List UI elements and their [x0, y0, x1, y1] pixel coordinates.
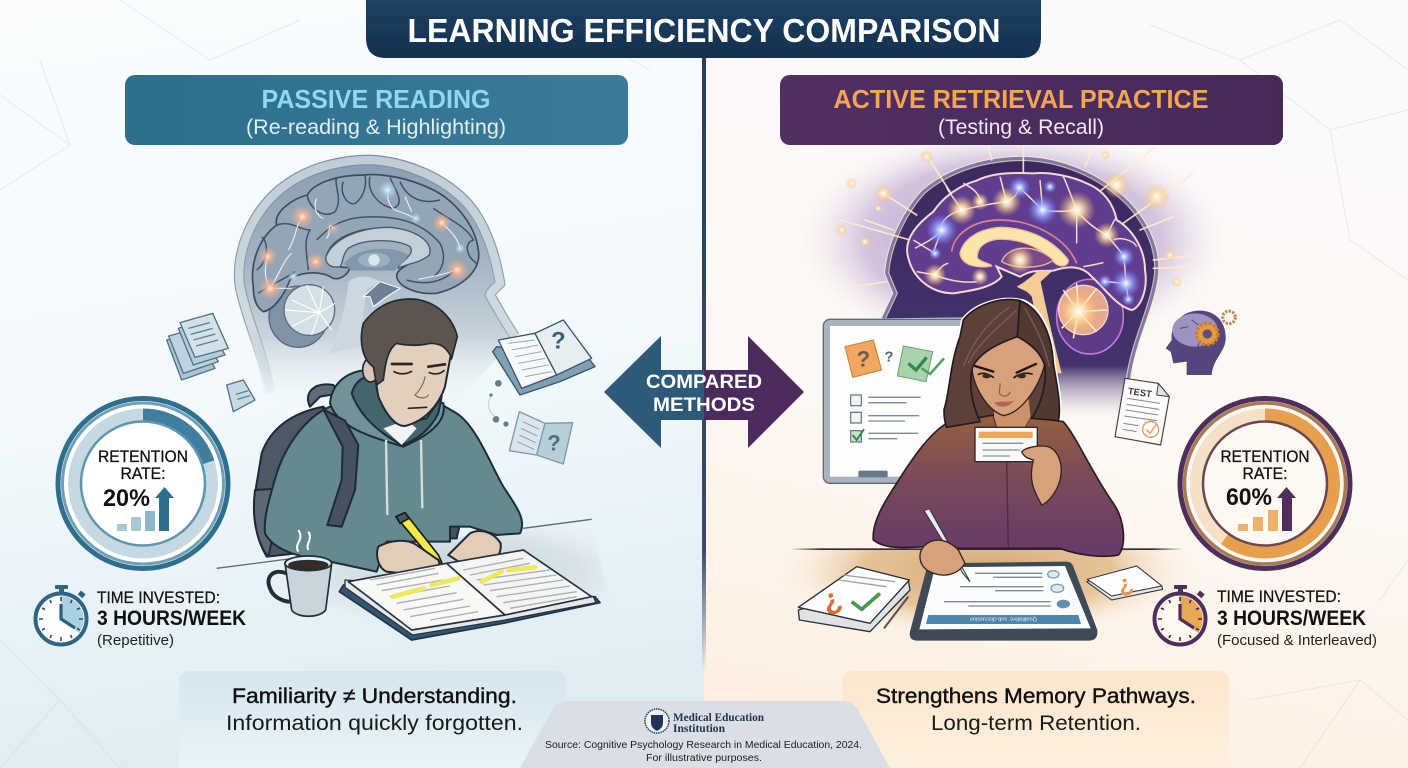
brain stem — [1017, 271, 1062, 373]
illustration: whiteboard with quiz — [823, 319, 980, 483]
tablet — [910, 562, 1097, 641]
retention gauge: passive 20% — [58, 398, 228, 568]
sticky check — [897, 346, 944, 382]
writing hand — [920, 540, 965, 575]
fading dots — [489, 380, 509, 427]
panel heading: active retrieval practice — [780, 75, 1283, 145]
retention gauge: active 60%: 60% — [1226, 484, 1272, 511]
title banner — [366, 0, 1041, 58]
source footer: Source: Cognitive Psychology Research in Medical Education, 2024. — [545, 739, 862, 751]
light rays — [840, 147, 1200, 287]
cortex — [253, 175, 479, 312]
source footer — [520, 701, 890, 768]
flash card — [975, 427, 1037, 462]
takeaway: active — [842, 671, 1229, 768]
sweater — [873, 415, 1124, 556]
retention gauge: passive 20%: RETENTION — [98, 448, 188, 466]
panel heading: passive reading: PASSIVE READING — [262, 84, 490, 114]
holding hand — [1022, 446, 1061, 505]
flashcard stack: ¿ — [818, 581, 845, 618]
corpus callosum — [326, 227, 430, 268]
panel heading: active retrieval practice: ACTIVE RETRIEVAL PRACTICE — [834, 84, 1208, 114]
retention gauge: passive 20%: 20% — [103, 485, 150, 512]
time invested: active: 3 HOURS/WEEK — [1217, 607, 1366, 630]
panel heading: passive reading — [125, 75, 628, 145]
icon: scattered papers — [167, 313, 255, 412]
illustration: student highlighting a book — [210, 299, 623, 653]
time invested: passive: 3 HOURS/WEEK — [97, 607, 246, 630]
background: passive side — [0, 0, 704, 768]
retention gauge: active 60% — [1180, 398, 1350, 568]
corpus callosum — [960, 227, 1068, 267]
open textbook — [339, 550, 600, 640]
desk — [210, 520, 623, 653]
neural sparks — [265, 190, 460, 288]
illustration: glowing active brain in head — [800, 127, 1227, 420]
compared methods double arrow: METHODS — [653, 394, 755, 416]
takeaway: active: Strengthens Memory Pathways. — [876, 685, 1196, 708]
backpack — [254, 384, 462, 557]
head silhouette — [883, 158, 1157, 420]
small question card: ¿ — [1115, 569, 1136, 599]
stylus — [924, 509, 970, 582]
time invested: active — [1217, 588, 1377, 649]
icon: head with gears — [1166, 311, 1235, 375]
source footer: Institution — [673, 723, 726, 735]
hair halo and back hair — [944, 300, 1059, 427]
cerebellum lobe — [1057, 279, 1123, 354]
background: active side — [704, 0, 1408, 768]
takeaway: passive: Information quickly forgotten. — [226, 712, 523, 735]
flashcard stack — [798, 567, 910, 632]
floating open book with question mark — [493, 320, 595, 395]
retention gauge: active 60%: RATE: — [1242, 465, 1288, 483]
time invested: passive: (Repetitive) — [97, 632, 174, 649]
brain stem — [330, 277, 380, 353]
neural glow points — [836, 150, 1182, 332]
highlighter — [396, 513, 447, 573]
stopwatch: active — [1154, 585, 1206, 644]
tablet: Qualitative: sub-discussion — [970, 615, 1037, 621]
small question card — [1087, 566, 1163, 600]
stopwatch: passive — [36, 585, 86, 644]
face and neck — [994, 397, 1031, 460]
hoodie — [265, 370, 522, 572]
shoulder strap — [323, 409, 358, 527]
checklist — [851, 395, 921, 442]
compared methods double arrow: COMPARED — [646, 371, 762, 393]
time invested: active: TIME INVESTED: — [1217, 588, 1341, 606]
institution logo — [645, 709, 669, 733]
retention gauge: active 60%: RETENTION — [1220, 448, 1310, 466]
cerebellum outer lobe — [269, 286, 328, 347]
front hair — [944, 300, 1020, 427]
time invested: passive — [97, 589, 246, 649]
coffee cup — [269, 530, 332, 616]
hair — [361, 299, 457, 385]
illustration: passive brain in head — [237, 158, 517, 407]
pencil — [884, 597, 908, 628]
sticky question — [845, 340, 882, 377]
illustration: whiteboard with quiz: ? — [885, 350, 894, 366]
test paper: TEST — [1127, 386, 1153, 399]
source footer: For illustrative purposes. — [646, 752, 762, 764]
desk surface — [777, 548, 1197, 689]
floating open book with question mark: ? — [551, 327, 566, 354]
panel heading: passive reading: (Re-reading & Highlighting) — [246, 116, 506, 139]
takeaway: passive — [179, 671, 566, 768]
time invested: passive: TIME INVESTED: — [97, 589, 220, 607]
floating book with question mark: ? — [547, 431, 561, 456]
floating book with question mark — [509, 412, 573, 464]
brain — [907, 173, 1146, 310]
illustration: student with flash card — [777, 300, 1197, 689]
takeaway: active: Long-term Retention. — [931, 712, 1141, 735]
face features — [392, 364, 445, 408]
cerebellum — [1059, 285, 1108, 335]
time invested: active: (Focused & Interleaved) — [1217, 632, 1377, 649]
hands — [377, 541, 443, 575]
panel heading: active retrieval practice: (Testing & Recall) — [938, 116, 1104, 139]
source footer: Medical Education — [673, 712, 765, 724]
sticky question: ? — [857, 347, 870, 372]
retention gauge: passive 20%: RATE: — [120, 465, 166, 483]
takeaway: passive: Familiarity ≠ Understanding. — [232, 685, 517, 708]
cerebellum — [284, 285, 335, 335]
test paper — [1115, 378, 1169, 445]
compared methods double arrow — [604, 336, 804, 448]
title banner: LEARNING EFFICIENCY COMPARISON — [408, 12, 1000, 49]
center divider — [702, 58, 706, 673]
